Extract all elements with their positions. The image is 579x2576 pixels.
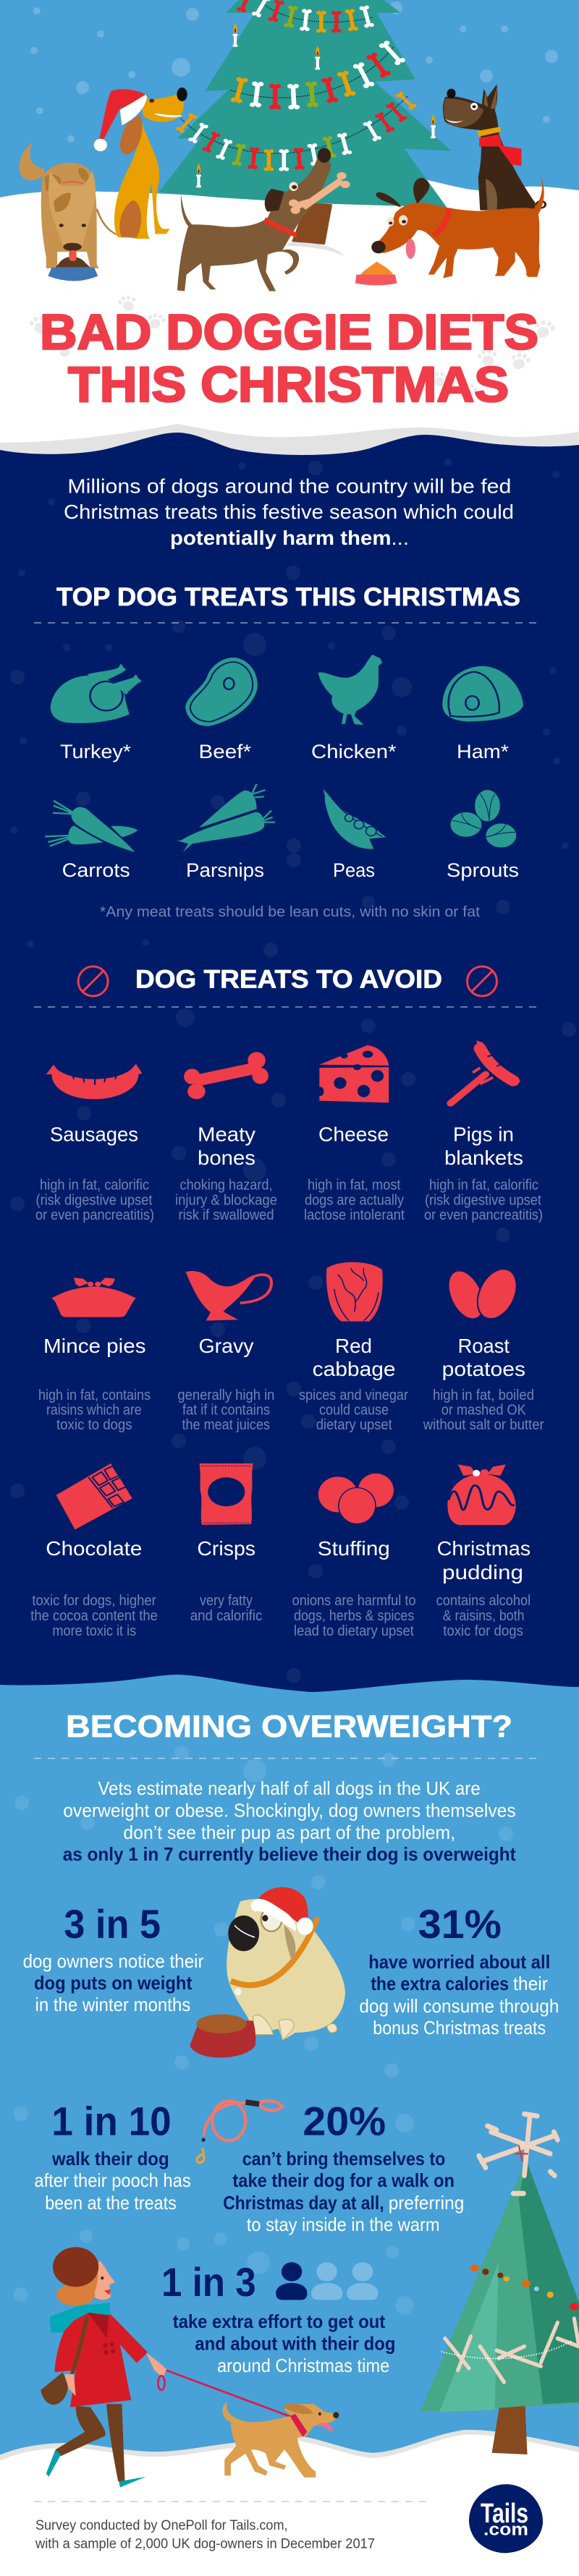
avoid treat names: blankets	[444, 1147, 523, 1169]
top treat labels: Chicken*	[311, 741, 397, 762]
avoid treat descriptions: toxic for dogs	[443, 1623, 523, 1639]
stat: 1 in 10: been at the treats	[45, 2192, 177, 2214]
logo text: Tails	[481, 2499, 528, 2529]
avoid treat descriptions: high in fat, calorific	[429, 1178, 538, 1194]
icon: ham	[442, 666, 523, 721]
avoid treat descriptions: dietary upset	[316, 1417, 392, 1433]
avoid treat descriptions: high in fat, contains	[38, 1387, 151, 1403]
stat: 31%: have worried about all	[368, 1951, 550, 1973]
avoid treat names: Red	[335, 1335, 372, 1357]
avoid treat names: Roast	[458, 1335, 510, 1357]
avoid treat descriptions: injury & blockage	[175, 1192, 277, 1208]
icon: pigs in blankets	[450, 1040, 520, 1103]
avoid treat descriptions: onions are harmful to	[292, 1593, 416, 1609]
christmas tree	[159, 0, 451, 256]
icon: chocolate	[56, 1463, 132, 1530]
avoid treat names: Cheese	[318, 1123, 389, 1146]
stat: 1 in 10	[34, 2098, 191, 2214]
icon: cheese	[317, 1045, 389, 1102]
avoid treat descriptions: lactose intolerant	[304, 1207, 405, 1223]
dog: tan eating from blue bowl	[19, 143, 118, 281]
illustration: walking dog	[222, 2402, 339, 2478]
background: snowflakes on navy	[10, 459, 576, 1683]
avoid treat descriptions: could cause	[319, 1403, 389, 1419]
heading: top dog treats: TOP DOG TREATS THIS CHRISTMAS	[56, 583, 520, 611]
avoid treat names: Mince pies	[43, 1335, 146, 1357]
overweight intro text: Vets estimate nearly half of all dogs in the UK are	[98, 1777, 481, 1799]
footnote: meat treats: *Any meat treats should be lean cuts, with no skin or fat	[100, 904, 480, 920]
avoid treat descriptions: without salt or butter	[423, 1417, 544, 1433]
top treat labels: Parsnips	[186, 859, 264, 881]
icon: meaty bone	[184, 1052, 269, 1099]
intro text: potentially harm them ...	[170, 527, 409, 549]
avoid treat names: Meaty	[198, 1123, 255, 1146]
avoid treat descriptions: or even pancreatitis)	[424, 1207, 543, 1223]
avoid treat descriptions: raisins which are	[46, 1403, 142, 1419]
source note: with a sample of 2,000 UK dog-owners in December 2017	[35, 2537, 375, 2552]
icon: beef	[185, 658, 258, 726]
avoid treat descriptions: the meat juices	[182, 1417, 270, 1433]
snow ground rim	[0, 2430, 579, 2470]
icon: turkey	[51, 664, 142, 723]
illustration: woman walking dog	[41, 2247, 292, 2488]
lower illustrations	[0, 1887, 579, 2576]
top treat labels: Peas	[333, 859, 375, 881]
intro text: Christmas treats this festive season which could	[64, 501, 514, 523]
heading: becoming overweight: BECOMING OVERWEIGHT?	[66, 1709, 512, 1744]
wave: grey snow edge	[0, 424, 579, 470]
avoid icons row 3	[56, 1463, 516, 1530]
stat: 3 in 5: in the winter months	[35, 1994, 190, 2015]
icon: stuffing	[318, 1474, 394, 1524]
avoid treat names: Crisps	[197, 1537, 255, 1560]
avoid treat names: Christmas	[437, 1537, 531, 1560]
panel: overweight section	[0, 1675, 579, 2576]
dog: ginger with tongue out	[371, 174, 544, 278]
top treat labels: Beef*	[198, 741, 252, 762]
avoid treat descriptions: toxic for dogs, higher	[32, 1593, 156, 1609]
icon: christmas pudding	[447, 1464, 516, 1525]
stat: 3 in 5: dog owners notice their	[23, 1950, 204, 1972]
avoid treat names: Pigs in	[453, 1123, 514, 1146]
source note: Survey conducted by OnePoll for Tails.com,	[35, 2518, 288, 2533]
stat: 20%: to stay inside in the warm	[247, 2214, 440, 2235]
stat: 20%: preferring	[389, 2192, 464, 2214]
overweight intro text: as only 1 in 7 currently believe their dog is overweight	[63, 1843, 516, 1865]
avoid treat descriptions: lead to dietary upset	[294, 1623, 414, 1639]
background: snowflakes in sky	[30, 1, 558, 143]
icon: roast potatoes	[442, 1264, 524, 1324]
icon: sprouts	[450, 790, 517, 848]
avoid treat descriptions: more toxic it is	[52, 1623, 136, 1639]
illustration: bowl of dog food	[190, 2015, 255, 2057]
dog: orange with santa hat	[94, 88, 187, 239]
top treat labels: Sprouts	[447, 859, 519, 881]
icon: carrots	[45, 801, 138, 852]
icon: gravy boat	[186, 1271, 271, 1321]
avoid treat names: cabbage	[313, 1358, 396, 1380]
avoid treat descriptions: risk if swallowed	[178, 1207, 274, 1223]
background: sky	[0, 0, 579, 463]
avoid treat descriptions	[30, 1178, 544, 1639]
avoid treat descriptions: or even pancreatitis)	[35, 1207, 154, 1223]
title	[40, 304, 538, 412]
illustration: christmas tree with bones	[420, 2114, 579, 2461]
logo text	[481, 2499, 528, 2539]
stat: 1 in 3	[161, 2259, 395, 2376]
heading: treats to avoid: DOG TREATS TO AVOID	[135, 965, 442, 993]
bone garlands	[175, 0, 418, 171]
stat: 1 in 10: 1 in 10	[51, 2098, 172, 2144]
avoid treat descriptions: high in fat, boiled	[433, 1387, 534, 1403]
stat: 20%: can’t bring themselves to	[242, 2148, 445, 2169]
top treat icons	[45, 655, 523, 852]
stat: 20%: 20%	[303, 2098, 386, 2144]
stat: 31%: the extra calories	[371, 1973, 509, 1994]
intro text: Millions of dogs around the country will be fed	[67, 475, 511, 498]
avoid treat descriptions: the cocoa content the	[30, 1608, 158, 1624]
icon: red cabbage	[326, 1262, 383, 1322]
hero illustration	[0, 0, 579, 464]
logo blob	[469, 2484, 543, 2553]
stat: 31%: their	[513, 1973, 548, 1994]
title: THIS CHRISTMAS	[68, 357, 509, 412]
stat: 31%	[359, 1901, 559, 2039]
avoid treat names: Stuffing	[318, 1537, 390, 1560]
avoid treat descriptions: high in fat, most	[308, 1178, 401, 1194]
avoid treat descriptions: very fatty	[200, 1593, 253, 1609]
avoid treat descriptions: generally high in	[177, 1387, 274, 1403]
stat: 20%: Christmas day at all,	[223, 2192, 384, 2214]
snow hills	[0, 179, 579, 464]
stat: 31%: dog will consume through	[359, 1995, 559, 2017]
avoid treat names: bones	[198, 1147, 255, 1169]
stat: 31%: bonus Christmas treats	[373, 2017, 546, 2039]
illustration: tree trunk front	[492, 2406, 528, 2454]
background: snowflakes on blue	[14, 1746, 513, 2315]
overweight intro text: overweight or obese. Shockingly, dog owners themselves	[63, 1799, 516, 1821]
icon: prohibited right	[468, 966, 496, 996]
bowl: orange food	[355, 262, 397, 285]
stat: 20%	[223, 2098, 464, 2235]
top treat labels: Carrots	[62, 859, 130, 881]
illustration: overweight dog with santa hat	[227, 1887, 345, 2041]
snow ground	[0, 2434, 579, 2576]
stat: 1 in 10: after their pooch has	[34, 2169, 191, 2191]
dog: doberman with scarf	[443, 85, 546, 211]
intro text	[64, 475, 514, 549]
avoid treat names: pudding	[442, 1561, 523, 1584]
illustration: dog lead	[197, 2101, 282, 2163]
avoid treat names: potatoes	[442, 1358, 525, 1380]
source note	[35, 2518, 375, 2552]
panel: navy treats section	[0, 433, 579, 1696]
icon: mince pie	[51, 1278, 136, 1317]
icon: parsnips	[177, 784, 275, 852]
stat: 1 in 10: walk their dog	[51, 2148, 169, 2169]
title: BAD DOGGIE DIETS	[40, 304, 538, 360]
top treat labels	[60, 741, 519, 881]
stat: 1 in 3: and about with their dog	[195, 2333, 395, 2355]
avoid treat descriptions: or mashed OK	[441, 1403, 526, 1419]
avoid treat descriptions: dogs are actually	[305, 1192, 404, 1208]
stat: 3 in 5: 3 in 5	[64, 1901, 161, 1947]
avoid treat descriptions: choking hazard,	[179, 1178, 272, 1194]
icon: crisps	[200, 1463, 253, 1525]
stat: 3 in 5	[23, 1901, 204, 2015]
icon: people 1 in 3	[276, 2262, 378, 2300]
avoid treat descriptions: & raisins, both	[443, 1608, 524, 1624]
candles	[196, 23, 436, 187]
avoid treat names: Gravy	[198, 1335, 253, 1357]
stat: 20%: take their dog for a walk on	[232, 2169, 455, 2191]
avoid treat descriptions: (risk digestive upset	[425, 1192, 541, 1208]
avoid treat descriptions: contains alcohol	[436, 1593, 531, 1609]
avoid treat descriptions: spices and vinegar	[299, 1387, 408, 1403]
avoid treat descriptions: dogs, herbs & spices	[294, 1608, 414, 1624]
overweight intro text: don’t see their pup as part of the problem,	[123, 1822, 455, 1843]
overweight intro text	[63, 1777, 516, 1865]
stat: 1 in 3: take extra effort to get out	[173, 2311, 386, 2332]
avoid treat descriptions: fat if it contains	[182, 1403, 270, 1419]
avoid treat names	[43, 1123, 531, 1584]
avoid treat descriptions: toxic to dogs	[56, 1417, 132, 1433]
icon: sausage	[46, 1064, 142, 1099]
avoid icons rows 1 and 2	[46, 1040, 524, 1324]
icon: chicken	[318, 655, 382, 725]
top treat labels: Turkey*	[60, 741, 132, 762]
top treat labels: Ham*	[457, 741, 510, 762]
stat: 1 in 3: 1 in 3	[161, 2259, 256, 2305]
avoid treat descriptions: high in fat, calorific	[40, 1178, 149, 1194]
avoid treat descriptions: (risk digestive upset	[36, 1192, 153, 1208]
stat: 3 in 5: dog puts on weight	[34, 1972, 193, 1994]
icon: peas	[323, 789, 386, 849]
stat: 31%: 31%	[418, 1901, 502, 1947]
logo text: .com	[483, 2520, 528, 2539]
icon: prohibited left	[78, 966, 108, 996]
dog: brown stretching for bone	[177, 148, 350, 292]
avoid treat descriptions: and calorific	[190, 1608, 262, 1624]
avoid treat names: Sausages	[50, 1123, 138, 1146]
paw prints	[28, 294, 557, 399]
stat: 1 in 3: around Christmas time	[217, 2355, 389, 2376]
avoid treat names: Chocolate	[46, 1537, 142, 1560]
